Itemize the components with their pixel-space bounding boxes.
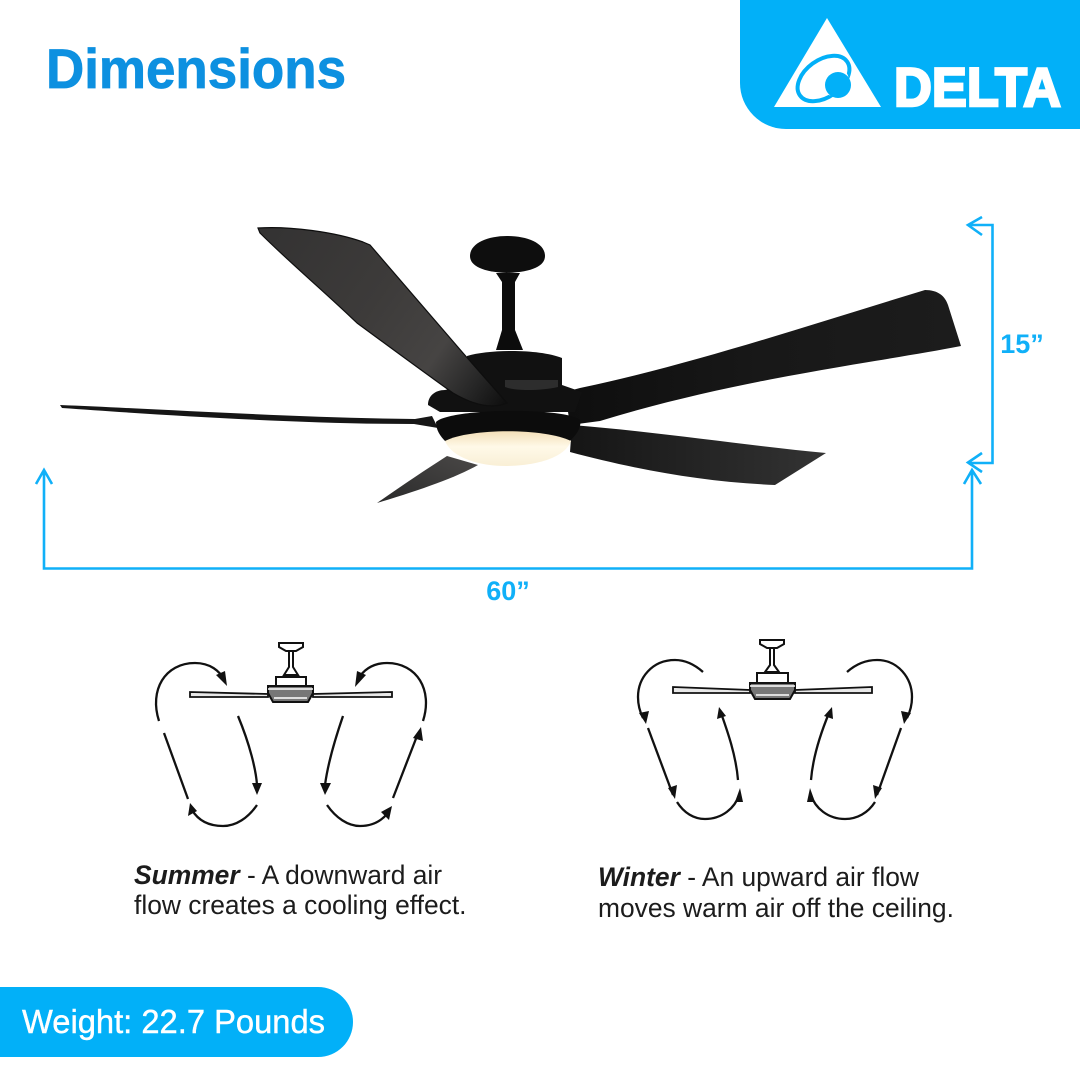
caption: winter: Winter	[598, 862, 682, 892]
small fan	[673, 640, 872, 699]
fan blade: bottom right	[570, 425, 826, 485]
lamp ring	[436, 411, 580, 442]
weight text: Weight: 22.7 Pounds	[22, 1003, 325, 1040]
fan blade: top left	[258, 228, 507, 406]
ceiling mount	[470, 236, 545, 273]
weight badge	[0, 987, 353, 1057]
caption: winter: moves warm air off the ceiling.	[598, 893, 954, 923]
airflow arrows right	[320, 663, 426, 826]
fan blade: right	[565, 290, 961, 425]
caption: winter: - An upward air flow	[680, 862, 920, 892]
fan blade: left thin	[60, 405, 438, 428]
caption: summer: flow creates a cooling effect.	[134, 890, 467, 920]
diagram: summer airflow	[156, 643, 426, 826]
lamp diffuser	[445, 431, 571, 466]
logo panel	[740, 0, 1080, 129]
label: 60 inches: 60”	[486, 576, 530, 606]
logo wordmark: DELTA	[894, 56, 1061, 118]
caption: summer: Summer	[134, 860, 241, 890]
small fan	[190, 643, 392, 702]
ceiling fan photo	[60, 228, 961, 503]
fan blade: bottom left	[377, 456, 478, 503]
dimension: height 15 inches	[968, 217, 1044, 472]
downrod	[496, 273, 523, 350]
motor highlight	[505, 380, 558, 390]
airflow arrows left	[638, 660, 743, 819]
motor housing	[428, 351, 582, 412]
label: 15 inches: 15”	[1000, 329, 1044, 359]
airflow arrows left	[156, 663, 262, 826]
dimension: width 60 inches	[36, 470, 981, 606]
title: Dimensions	[46, 37, 346, 100]
icon: delta triangle	[774, 18, 881, 111]
caption: summer: - A downward air	[240, 860, 442, 890]
airflow arrows right	[807, 660, 912, 819]
diagram: winter airflow	[638, 640, 912, 819]
